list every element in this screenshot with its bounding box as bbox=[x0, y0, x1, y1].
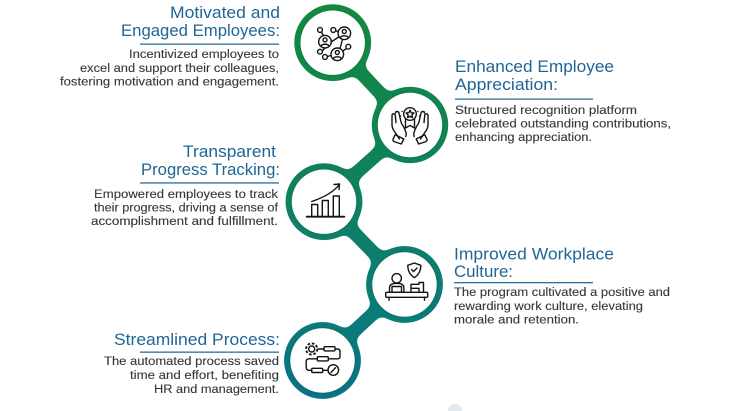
heading: Transparent bbox=[183, 143, 276, 161]
heading: Appreciation: bbox=[455, 76, 558, 94]
heading: Enhanced Employee bbox=[455, 58, 614, 76]
body text bbox=[104, 354, 279, 396]
body text: Structured recognition platform bbox=[455, 103, 637, 117]
body text: morale and retention. bbox=[454, 312, 579, 326]
body text: time and effort, benefiting bbox=[130, 368, 279, 382]
body text: celebrated outstanding contributions, bbox=[455, 116, 671, 130]
heading: Culture: bbox=[454, 263, 513, 281]
heading: Streamlined Process: bbox=[114, 331, 280, 349]
heading bbox=[455, 58, 614, 94]
icon: growth bar chart bbox=[307, 184, 344, 217]
body text: enhancing appreciation. bbox=[455, 130, 592, 144]
icon: employee at desk with shield bbox=[386, 263, 428, 300]
body text: HR and management. bbox=[154, 382, 279, 396]
panel: enhanced employee appreciation bbox=[455, 58, 671, 144]
body text: Incentivized employees to bbox=[129, 47, 279, 61]
panel: motivated and engaged employees bbox=[60, 4, 280, 88]
icon: employee network bbox=[318, 27, 351, 61]
body text bbox=[454, 285, 670, 326]
body text: rewarding work culture, elevating bbox=[454, 299, 643, 313]
panel: transparent progress tracking bbox=[91, 143, 280, 228]
body text: Empowered employees to track bbox=[94, 187, 279, 201]
background accent: pale circle at bottom bbox=[448, 404, 462, 411]
heading: Engaged Employees: bbox=[121, 22, 280, 40]
heading: Improved Workplace bbox=[454, 246, 614, 264]
body text: excel and support their colleagues, bbox=[80, 61, 279, 75]
heading bbox=[454, 246, 614, 281]
panel: streamlined process bbox=[104, 331, 280, 396]
heading: Progress Tracking: bbox=[141, 161, 280, 179]
body text: their progress, driving a sense of bbox=[94, 200, 279, 214]
icon: automated process flow bbox=[306, 343, 340, 375]
panel: improved workplace culture bbox=[454, 246, 670, 326]
body text bbox=[455, 103, 671, 144]
body text: The automated process saved bbox=[104, 354, 279, 368]
body text bbox=[60, 47, 279, 88]
icon: hands holding award bbox=[392, 108, 428, 144]
heading bbox=[121, 4, 280, 40]
body text: fostering motivation and engagement. bbox=[60, 74, 279, 88]
heading: Motivated and bbox=[170, 4, 280, 22]
heading bbox=[141, 143, 280, 179]
circular chain connector bbox=[284, 4, 448, 399]
body text bbox=[91, 187, 279, 228]
body text: The program cultivated a positive and bbox=[454, 285, 670, 299]
body text: accomplishment and fulfillment. bbox=[91, 214, 278, 228]
